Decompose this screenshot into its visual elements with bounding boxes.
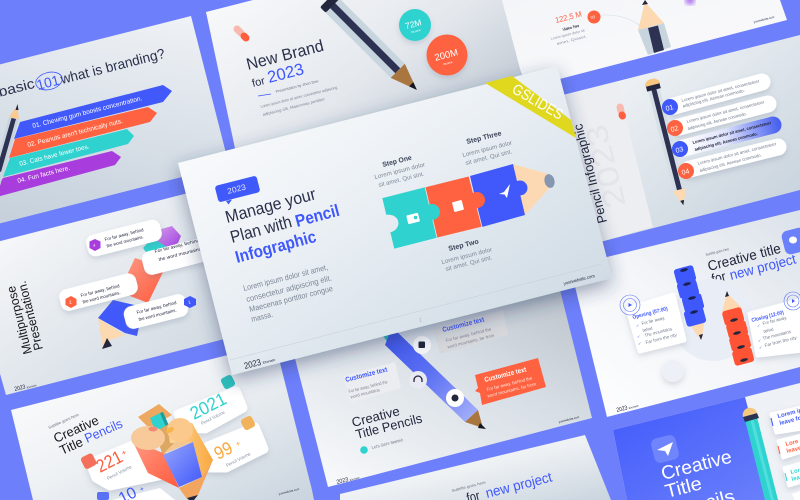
heading: what is branding <box>0 45 167 103</box>
number badges: 04 <box>681 168 690 177</box>
step one: sit amet. Qui sint. <box>378 171 425 189</box>
banner: GSLIDES: GSLIDES <box>509 81 566 123</box>
footer <box>336 415 580 486</box>
heading: manage your plan: Pencil <box>293 201 342 231</box>
banner: GSLIDES <box>485 76 576 138</box>
card: opening: ✓ <box>636 323 639 328</box>
label 4: For far away, behind <box>104 227 144 242</box>
callout: customize text red: word mountains, far from <box>487 381 537 398</box>
icon: isometric pencil <box>131 404 213 500</box>
number badges: 02 <box>670 125 679 134</box>
heading: for new project <box>451 469 554 500</box>
callout: customize text top: word mountains, far from <box>447 333 495 349</box>
body text: Maecenas porttitor congue <box>248 284 334 314</box>
footer: 2023 <box>336 477 350 486</box>
stat: 122,5 M: 122,5 M <box>554 9 583 25</box>
arrow list: 03. Cats have fewer toes. <box>19 143 90 168</box>
started line: Let's Get's Started <box>371 437 403 450</box>
card: closing: For far away, <box>762 315 787 326</box>
arrow list: 02. Peanuts aren't technically nuts. <box>27 118 124 149</box>
card: 2021: 2021 <box>187 388 230 424</box>
card: closing <box>750 300 800 355</box>
blue panel <box>613 397 772 500</box>
page number: 1 <box>419 318 422 324</box>
icon: pill <box>620 107 622 116</box>
heading: new brand: adipiscing elit. Maecenas porttitor <box>262 96 326 117</box>
card: closing: behind <box>763 327 774 334</box>
label 4: 4 <box>93 242 97 248</box>
icon: segmented pencil <box>98 226 181 349</box>
heading: creative title pencils white <box>659 447 737 500</box>
footer logo: iDonate <box>262 358 276 365</box>
footer logo: 2023 <box>14 384 27 393</box>
step three <box>462 130 513 167</box>
slide: blue creative title <box>613 383 800 500</box>
stat: 122,5 M: amet, Quiset. <box>556 34 587 46</box>
card: 10+ <box>97 484 175 500</box>
target icon right <box>784 292 800 310</box>
label 1: the word mountains. <box>138 307 177 322</box>
heading: creative title for new project: for <box>710 268 728 287</box>
heading: creative title pencils: Title Pencils <box>354 410 424 442</box>
card: closing: The mountains <box>762 329 792 341</box>
card: 99+ <box>208 415 264 468</box>
icon: teal pencil <box>743 408 778 500</box>
card: opening: ✓ <box>637 334 640 339</box>
label 4: the word mountains. <box>106 234 144 248</box>
step three: Step Three <box>466 130 502 146</box>
card: 2021: Pencil Volume <box>200 409 226 426</box>
icon: plane tile <box>650 434 680 464</box>
step one: Step One <box>382 155 413 169</box>
heading: manage your plan: Infographic <box>233 227 318 267</box>
label 2: the word mountains. <box>82 290 121 304</box>
footer logo <box>14 383 38 393</box>
callout: customize text top <box>433 310 508 354</box>
circle stat: 200M: 200M <box>434 47 459 64</box>
callout: customize text left: For far away, behind the <box>348 379 388 394</box>
step two: Step Two <box>448 238 480 253</box>
label 1 <box>122 292 196 331</box>
started line <box>360 437 403 454</box>
callout: customize text left: word mountains <box>350 387 381 399</box>
lead <box>543 173 556 189</box>
heading: new brand: 2023 <box>266 60 306 87</box>
pill text: Lorem ipsum dolor sit amet, consectetuer <box>681 78 760 103</box>
card: opening: For far away, <box>641 315 666 326</box>
callout: customize text top: Customize text <box>442 316 486 334</box>
heading: creative title pencils: Subtitle goes here <box>47 412 80 430</box>
wood tip <box>513 164 555 215</box>
badge: 2023: 2023 <box>226 182 247 196</box>
puzzle: blue <box>470 164 528 227</box>
icon: pencil <box>638 0 671 55</box>
pill text: adipiscing elit. Aenean commodo. <box>699 152 762 173</box>
heading: new brand: New Brand <box>245 37 326 74</box>
heading: new brand <box>245 37 338 117</box>
label 3: the word mountains. <box>158 246 203 262</box>
slide: pencil infographic <box>555 35 800 242</box>
card: opening <box>628 295 684 351</box>
heading: creative title for new project <box>705 240 798 287</box>
footer logo: 2023 <box>616 405 629 414</box>
card: 99+: Pencil Volume <box>225 451 252 468</box>
footer logo <box>243 357 276 371</box>
heading: what is branding: 101 <box>35 72 61 93</box>
callout: customize text red: Customize text <box>484 366 528 384</box>
list cards <box>771 407 800 500</box>
card: opening: Far from the city <box>645 332 678 345</box>
stat: 122,5 M <box>550 9 600 46</box>
heading: manage your plan <box>223 184 342 267</box>
card: 2021 <box>178 374 243 429</box>
circle stat: 200M: Income <box>442 60 453 66</box>
slide: main pencil infographic <box>178 66 612 375</box>
heading: new brand: Lorem ipsum dolor sit amet, consectetur adipiscing <box>260 85 338 109</box>
pill text: adipiscing elit. Aenean commodo. <box>694 131 758 152</box>
pill text <box>681 78 777 173</box>
heading: multipurpose presentation: Presentation. <box>15 279 46 352</box>
card: 99+: + <box>234 438 242 449</box>
label 3 <box>140 235 216 277</box>
stat: 122,5 M: Video Two <box>562 23 580 32</box>
step one <box>374 155 426 189</box>
number badges: 03 <box>675 146 684 155</box>
icon: blue stacked pencil <box>673 265 707 340</box>
icon: large pencil <box>320 0 424 97</box>
puzzle pencil <box>382 164 556 249</box>
number badges <box>662 99 694 179</box>
icon: blue pencil <box>383 327 486 429</box>
heading: creative title pencils: Pencils <box>82 416 125 446</box>
circle stat: 72M <box>399 9 431 41</box>
step three: Lorem ipsum dolor <box>462 141 513 159</box>
ball <box>662 360 684 382</box>
puzzle: teal <box>382 187 440 249</box>
circle stat: 72M: Income <box>410 28 421 34</box>
card: 99+: 99 <box>211 438 236 464</box>
heading: for new project: new project <box>484 469 554 500</box>
pill text: adipiscing elit. Aenean commodo. <box>682 88 745 108</box>
footer logo: iDonate <box>26 383 38 389</box>
icon: red stacked pencil <box>722 291 755 366</box>
card: 221+: + <box>120 447 128 458</box>
pill text: Lorem ipsum dolor sit amet, consectetuer <box>697 141 777 166</box>
target icon left <box>620 295 640 315</box>
card: closing: Far from the city <box>764 335 798 348</box>
footer url: yourwebsite.com <box>753 15 775 24</box>
callout: customize text red <box>475 358 546 405</box>
curve <box>600 15 642 28</box>
card: opening: Opening (07:00) <box>632 306 669 321</box>
callout: customize text left <box>343 362 401 403</box>
footer logo: 2023 <box>243 357 262 371</box>
label 4 <box>84 218 164 258</box>
body text: massa. <box>250 310 274 324</box>
circle stat: 200M <box>426 34 468 76</box>
backdrop circle <box>672 279 754 361</box>
label 1: 1 <box>188 299 192 305</box>
slide: creative title pencils <box>11 343 314 500</box>
label 1: For far away, behind <box>136 300 177 315</box>
icon: pencil <box>0 104 19 186</box>
arrow list: 01. Chewing gum boosts concentration. <box>32 95 143 130</box>
footer url: yourwebsite.com <box>278 487 300 496</box>
heading: creative title pencils: Creative <box>350 403 401 430</box>
slide: video stats <box>502 0 787 88</box>
heading: for new project: Subtitle goes here <box>451 480 486 493</box>
heading: creative title for new project: Subtitle goes here <box>705 247 730 257</box>
stat: 122,5 M: 03 <box>590 14 596 20</box>
heading: creative title pencils: Title <box>57 434 85 458</box>
arrow list <box>0 85 172 197</box>
glow <box>685 0 695 5</box>
heading: creative title for new project: Creative title <box>706 240 783 274</box>
pill: highlighted <box>684 125 773 148</box>
callout: customize text top: For far away, behind the <box>445 326 492 343</box>
slide: new project bottom <box>340 435 611 500</box>
watermark: 2023 <box>580 121 633 211</box>
footer url: yourwebsite.com <box>563 273 595 286</box>
heading: multipurpose presentation: Multipurpose <box>4 284 35 356</box>
step two <box>441 238 493 273</box>
circle stat: 72M: 72M <box>404 17 423 31</box>
pill text: Lorem ipsum dolor sit amet, consectetuer <box>686 99 765 124</box>
heading: creative title pencils white: Creative <box>659 447 734 485</box>
card: closing: ✓ <box>757 323 760 328</box>
icon: pill <box>237 29 246 38</box>
footer: iDonate <box>349 475 361 482</box>
pill text: Lorem ipsum dolor sit amet, consectetuer <box>692 120 772 145</box>
card: 221+: Pencil Volume <box>106 464 133 481</box>
body text: consectetur adipiscing elit. <box>245 273 333 304</box>
slide: customize text <box>280 230 592 487</box>
card: closing: ✓ <box>758 338 761 343</box>
slide: multipurpose <box>0 190 240 395</box>
icon: chat <box>780 226 800 256</box>
slide: what is branding <box>0 16 229 231</box>
heading: creative title pencils <box>47 412 125 458</box>
card: opening: The mountains <box>644 326 673 338</box>
icon: pencil <box>643 77 691 207</box>
card: closing: ✓ <box>759 345 762 350</box>
heading: manage your plan: Manage your <box>223 184 318 227</box>
footer: yourwebsite.com <box>558 415 580 424</box>
step two: sit amet. Qui sint. <box>445 255 493 273</box>
footer logo: iDonate <box>628 403 640 410</box>
body text: Lorem ipsum dolor sit amet, <box>242 263 329 293</box>
step one: Lorem ipsum dolor <box>374 162 426 181</box>
card: opening: behind <box>642 326 653 333</box>
label 2: For far away, behind <box>80 283 120 298</box>
body text <box>242 263 334 324</box>
slide: new brand <box>206 0 525 172</box>
callout: customize text left: Customize text <box>345 366 389 384</box>
left panel <box>555 82 653 242</box>
card: closing: Closing (12:00) <box>751 310 785 324</box>
pencil icons <box>409 336 464 407</box>
step two: Lorem ipsum dolor <box>441 247 493 266</box>
card: 221+ <box>80 442 168 486</box>
pill text: adipiscing elit. Aenean commodo. <box>687 111 747 131</box>
heading: new brand: for <box>251 75 267 90</box>
arrow list: 04. Fun facts here. <box>17 165 71 185</box>
card: opening: ✓ <box>638 341 641 346</box>
badge: 2023 <box>215 175 260 204</box>
list cards: Lore <box>785 439 800 448</box>
card: 10+: + <box>139 486 146 494</box>
step three: sit amet. Qui sint. <box>465 149 513 167</box>
label 3: For far away, behind <box>154 238 200 254</box>
heading: creative title pencils: Creative <box>51 413 101 446</box>
heading: new brand: Presentation by Jhon Doe <box>275 79 319 94</box>
heading: creative title for new project: new project <box>728 251 798 283</box>
label 2 <box>58 272 140 313</box>
number badges: 01 <box>665 104 674 113</box>
slide: new project right <box>570 210 800 417</box>
card: 221+: 221 <box>93 446 126 477</box>
callout: customize text red: For far away, behind the <box>486 375 533 392</box>
pill list <box>674 82 778 169</box>
heading: what is branding: what is branding? <box>58 45 167 87</box>
heading: manage your plan: Plan with <box>228 212 294 247</box>
heading: pencil infographic: Pencil Infographic <box>570 122 610 225</box>
puzzle: red <box>425 176 485 238</box>
footer line <box>230 264 602 360</box>
footer logo <box>616 403 640 414</box>
label 2: 2 <box>69 299 73 305</box>
stat: 122,5 M: Lorem ipsum dolor sit <box>550 28 585 41</box>
